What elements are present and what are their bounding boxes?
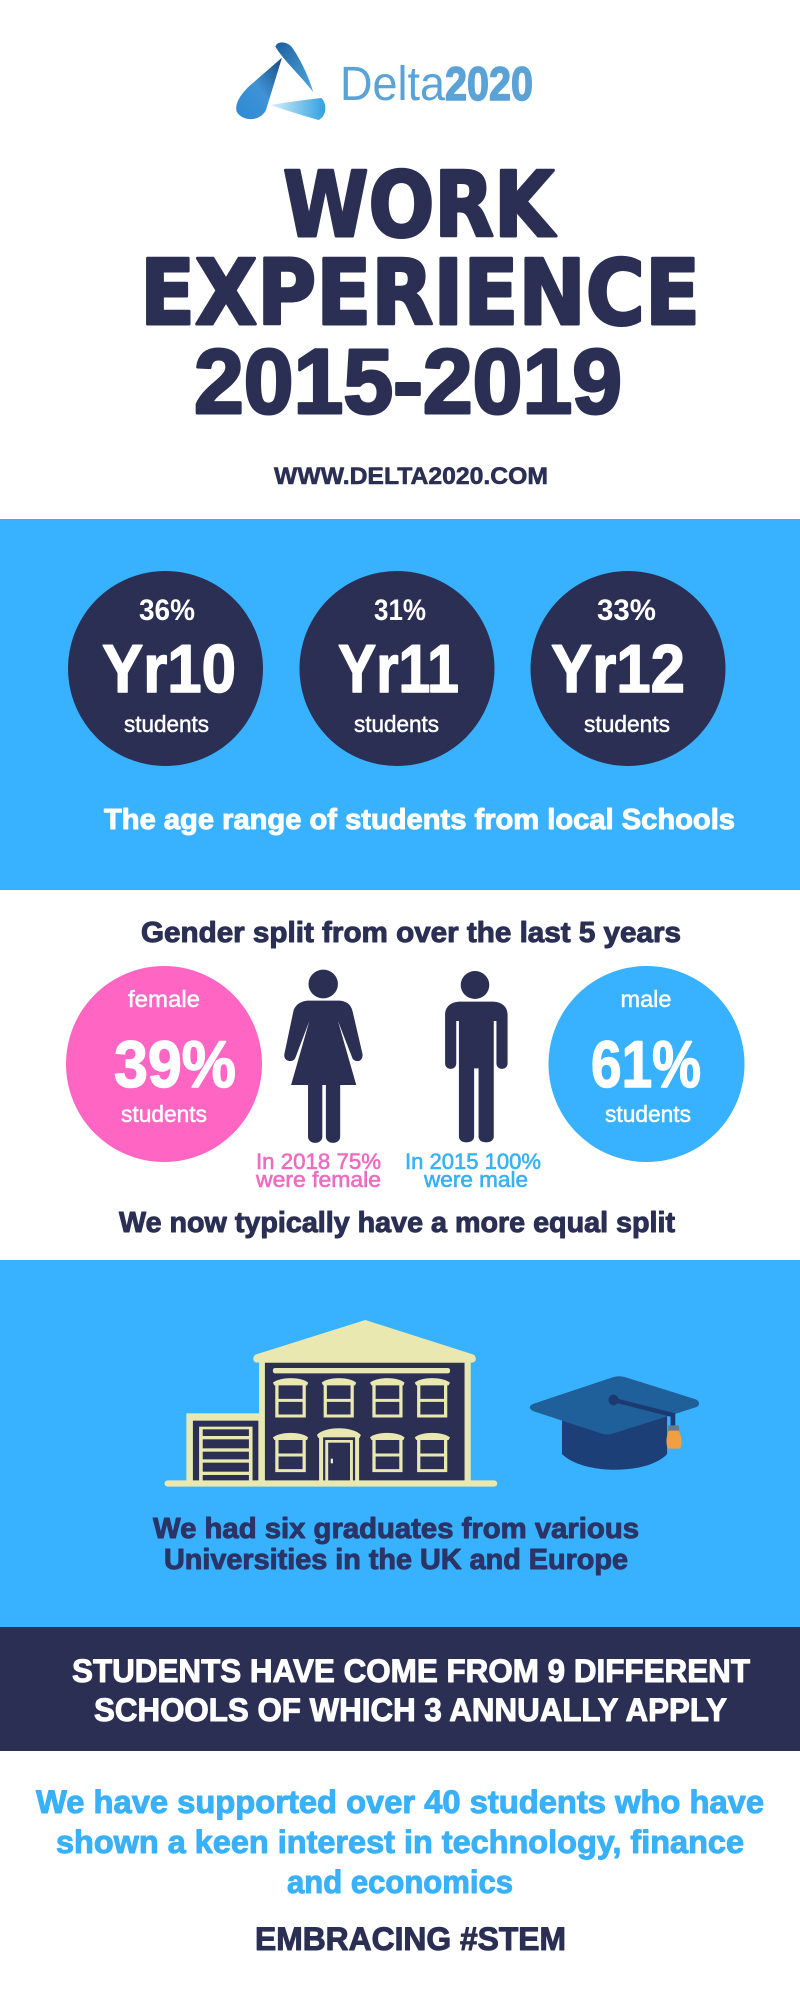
supporting statement	[36, 1784, 764, 1900]
stat circle: male: 61%	[591, 1027, 701, 1101]
icon: male figure	[445, 971, 508, 1142]
icon: graduation cap	[530, 1376, 699, 1470]
title	[140, 153, 700, 433]
schools text: STUDENTS HAVE COME FROM 9 DIFFERENT	[72, 1653, 750, 1689]
icon: house	[165, 1320, 497, 1487]
stat circle: male	[548, 966, 744, 1162]
stat circle: Yr11	[300, 571, 494, 766]
gender heading: Gender split from over the last 5 years	[141, 917, 681, 949]
stat circle: Yr12	[530, 571, 726, 766]
stat circle: female: 39%	[114, 1027, 236, 1101]
supporting statement: We have supported over 40 students who have	[36, 1784, 764, 1820]
stat circle: Yr12: 33%	[597, 594, 656, 627]
title: WORK	[283, 153, 557, 258]
supporting statement: shown a keen interest in technology, finance	[56, 1824, 744, 1860]
icon: triangular blades	[236, 42, 325, 120]
stat circle: Yr10: students	[124, 711, 209, 737]
icon: female figure	[284, 970, 363, 1143]
logo wordmark: 2020	[445, 57, 533, 110]
stat circle: female	[66, 966, 262, 1162]
stat circle: female: students	[121, 1101, 207, 1127]
stat circle: Yr12: students	[584, 711, 670, 737]
graduates caption: Universities in the UK and Europe	[164, 1544, 628, 1576]
stat circle: Yr12: Yr12	[551, 631, 685, 707]
schools text: SCHOOLS OF WHICH 3 ANNUALLY APPLY	[94, 1692, 727, 1728]
supporting statement: and economics	[287, 1864, 513, 1900]
graduates caption	[153, 1513, 639, 1576]
male note: In 2015 100%	[405, 1149, 541, 1174]
panel: age range	[0, 519, 800, 890]
stat circle: male: male	[620, 986, 672, 1012]
title: EXPERIENCE	[140, 241, 700, 346]
schools text	[72, 1653, 750, 1728]
female note: In 2018 75%	[256, 1149, 381, 1174]
stat circle: Yr11: Yr11	[338, 631, 459, 707]
stat circle: Yr11: students	[354, 711, 439, 737]
graduates caption: We had six graduates from various	[153, 1513, 639, 1545]
website url: WWW.DELTA2020.COM	[274, 463, 548, 490]
female note	[255, 1149, 381, 1192]
panel: gender split	[66, 917, 744, 1239]
logo: Delta2020	[236, 42, 533, 120]
male note	[405, 1149, 541, 1192]
hashtag: EMBRACING #STEM	[255, 1921, 566, 1957]
logo wordmark: Delta	[340, 58, 445, 111]
panel: graduates	[0, 1260, 800, 1627]
female note: were female	[255, 1167, 381, 1192]
stat circle: Yr10: 36%	[139, 594, 195, 627]
stat circle: Yr10: Yr10	[102, 631, 236, 707]
title: 2015-2019	[194, 331, 622, 433]
age range caption: The age range of students from local Schools	[104, 804, 735, 836]
male note: were male	[423, 1167, 528, 1192]
panel: schools banner	[0, 1627, 800, 1751]
stat circle: female: female	[128, 986, 200, 1012]
stat circle: male: students	[605, 1101, 691, 1127]
stat circle: Yr10	[68, 571, 263, 766]
gender conclusion: We now typically have a more equal split	[119, 1207, 675, 1239]
stat circle: Yr11: 31%	[374, 594, 426, 627]
